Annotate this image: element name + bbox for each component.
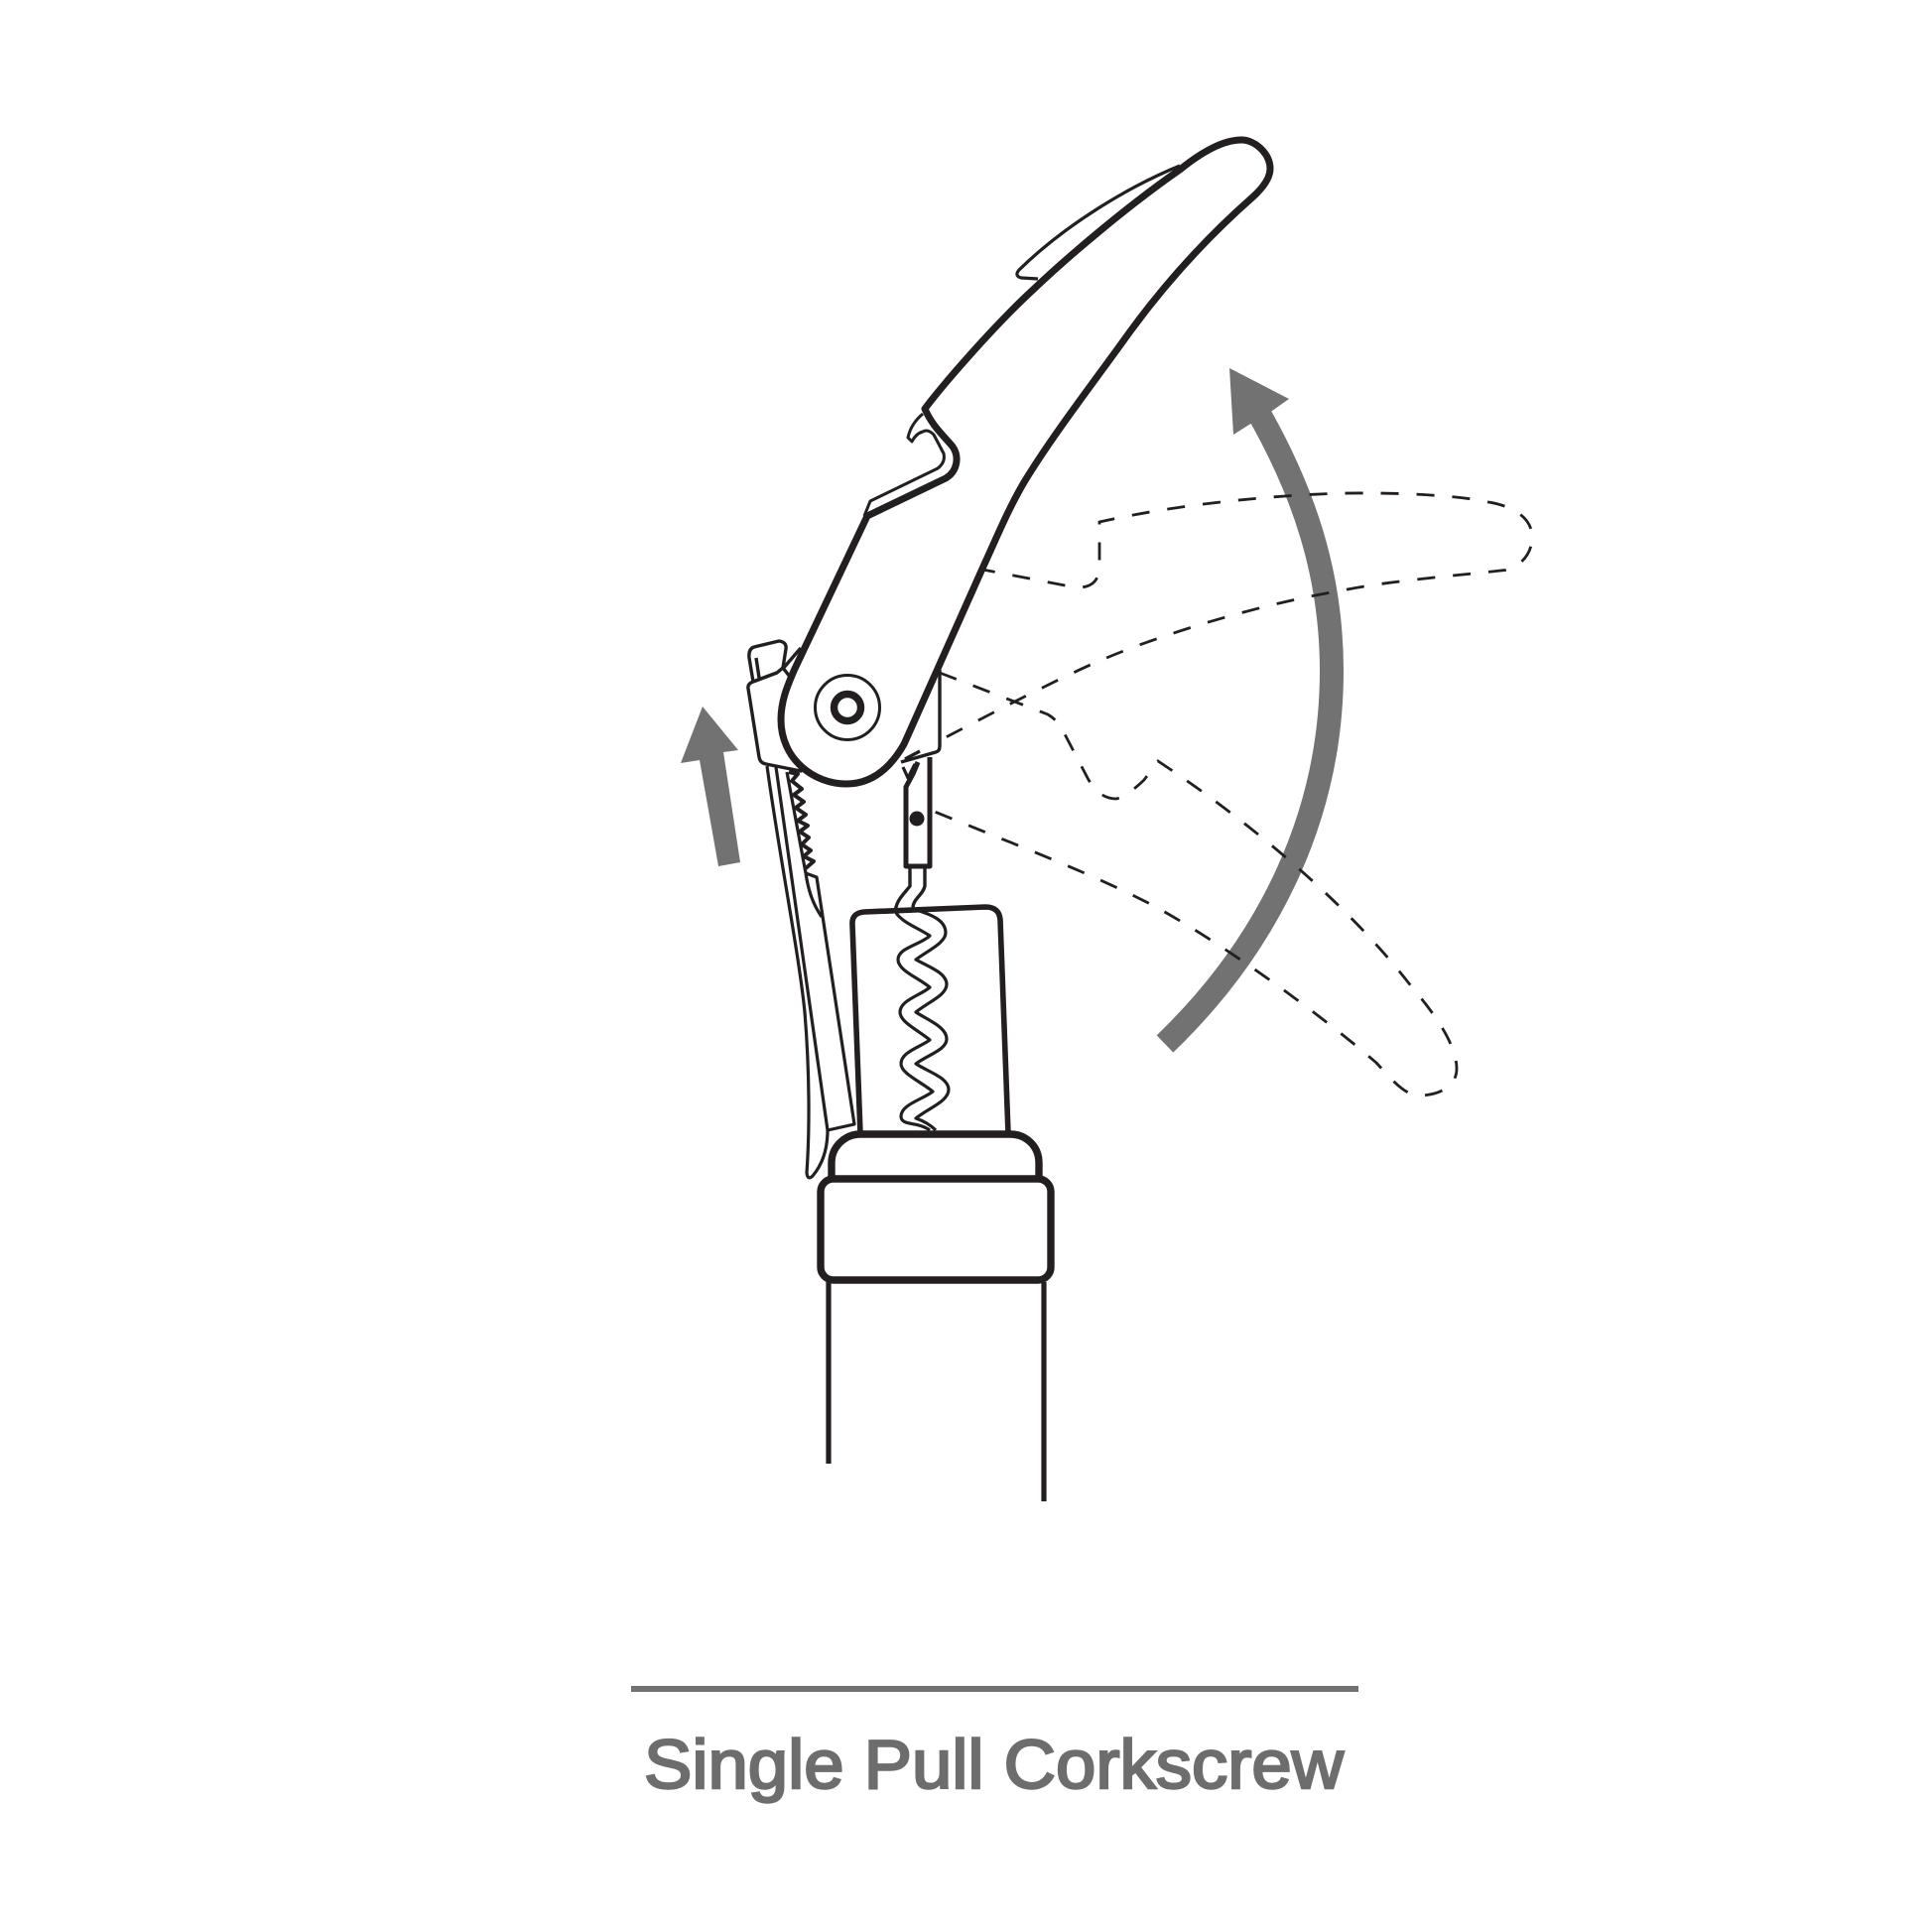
pivot rivet outer ring (816, 675, 879, 740)
arrow: small upward arrow (681, 707, 740, 866)
corkscrew worm (896, 910, 949, 1130)
title: Single Pull Corkscrew (644, 1726, 1344, 1803)
ghost: dashed raised lever position (933, 493, 1532, 744)
bottle neck right (1041, 1282, 1047, 1501)
handle body (781, 140, 1270, 784)
lever arm with teeth (767, 766, 854, 1178)
cork (852, 907, 1008, 1133)
title rule (631, 1686, 1358, 1692)
main handle (781, 140, 1270, 784)
hinge bracket and tab (748, 641, 940, 771)
thin foil knife blade (1017, 166, 1180, 279)
bottle opener hook (864, 414, 944, 516)
arrow: large curved rotation arrow (1165, 368, 1332, 1044)
pivot rivet inner ring (834, 695, 861, 720)
bottle lip (832, 1134, 1039, 1177)
bottle top (821, 1134, 1051, 1501)
teeth (789, 772, 814, 868)
bottle neck left (826, 1282, 832, 1464)
ghost: dashed lowered lever position (935, 673, 1457, 1095)
bottle collar (821, 1179, 1051, 1280)
corkscrew shaft (895, 757, 930, 915)
